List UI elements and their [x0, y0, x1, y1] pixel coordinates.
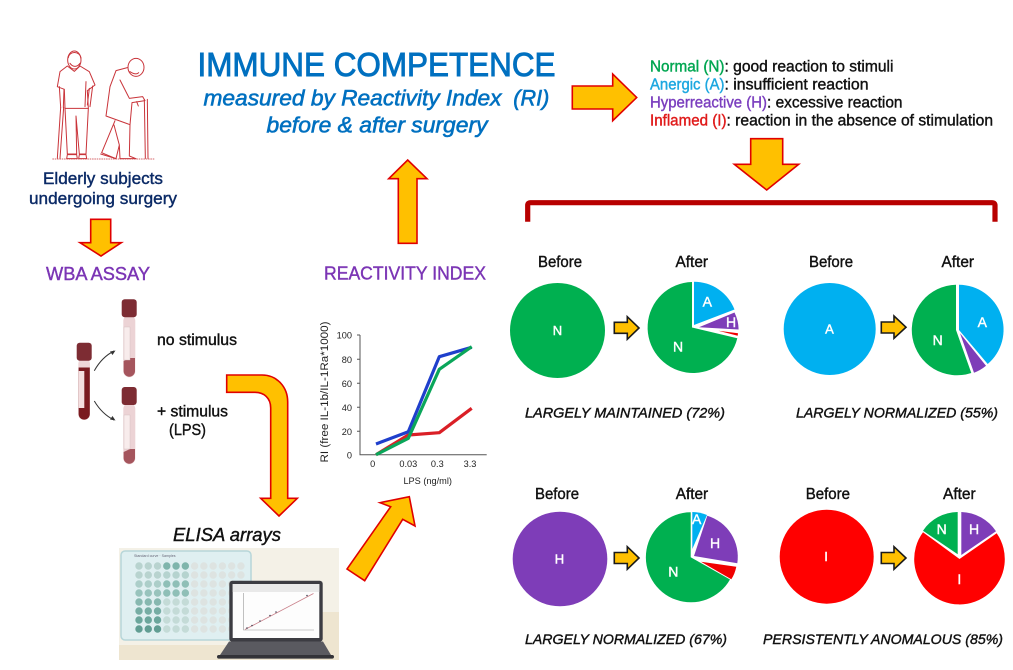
subtitle: before & after surgery [266, 112, 489, 137]
pie labels: N [668, 564, 678, 580]
arrow: before to after [881, 547, 906, 569]
legend: reactivity definitions [650, 58, 993, 130]
label: ELISA arrays: ELISA arrays [173, 524, 281, 545]
pie labels: I [957, 571, 961, 587]
pie labels [553, 294, 736, 354]
caption: LARGELY MAINTAINED (72%) [525, 405, 725, 421]
arrow: up to title [389, 160, 427, 243]
arrow: down to WBA assay [80, 219, 121, 256]
y axis labels: 0 [347, 450, 352, 460]
pie labels: I [824, 549, 828, 564]
legend: reactivity definitions: Normal (N) [650, 58, 724, 75]
legend: reactivity definitions: : excessive reaction [767, 95, 902, 112]
pie labels: N [937, 521, 947, 537]
y axis labels: 20 [342, 427, 352, 437]
line chart: reactivity index [319, 321, 487, 486]
label: elderly subjects: undergoing surgery [29, 189, 178, 208]
bracket [528, 203, 995, 222]
x axis labels: 0.3 [431, 459, 444, 469]
y axis title: RI (free IL-1b/IL-1Ra*1000) [319, 321, 331, 462]
pie labels: H [726, 314, 736, 330]
x axis title: LPS (ng/ml) [403, 476, 452, 486]
arrow: title to legend [572, 74, 637, 121]
pie labels: A [825, 322, 834, 336]
y axis labels: 40 [342, 403, 352, 413]
image: ELISA plate and laptop [119, 548, 339, 660]
x axis labels: 3.3 [464, 459, 476, 469]
pie: after [646, 512, 738, 602]
pie: after [912, 285, 1004, 375]
pie: before [784, 283, 876, 375]
image: ELISA plate and laptop: Standard curve · Samples [134, 554, 176, 558]
arrow: before to after [614, 317, 639, 339]
y axis labels: 60 [342, 379, 352, 389]
label: after: After [943, 486, 976, 503]
title: IMMUNE COMPETENCE [198, 47, 556, 84]
subtitle [204, 86, 549, 137]
pie labels [824, 521, 979, 587]
icon: elderly people with canes [53, 51, 155, 159]
label: no stimulus: no stimulus [157, 332, 237, 349]
x axis labels [370, 459, 476, 469]
label: after: After [942, 254, 974, 271]
caption: PERSISTENTLY ANOMALOUS (85%) [763, 631, 1003, 647]
pie labels: N [933, 332, 943, 348]
pie labels: H [969, 521, 979, 537]
arrow: before to after [614, 547, 639, 569]
y axis labels: 100 [337, 330, 352, 340]
pie: after [914, 512, 1005, 604]
caption: LARGELY NORMALIZED (67%) [525, 631, 727, 647]
pie: after [648, 282, 739, 373]
pie labels: H [555, 552, 564, 566]
x axis labels: 0.03 [399, 459, 417, 469]
legend: reactivity definitions: Hyperreactive (H) [650, 95, 767, 112]
label: elderly subjects: Elderly subjects [43, 169, 163, 188]
arrow: before to after [881, 316, 906, 338]
icon: blood tubes [77, 299, 137, 464]
y axis labels: 80 [342, 355, 352, 365]
legend: reactivity definitions: Inflamed (I) [650, 113, 726, 130]
label: after: After [676, 486, 708, 503]
arrow: legend to results [734, 139, 799, 190]
label: plus stimulus LPS: + stimulus [157, 404, 228, 421]
pie: before [513, 512, 607, 606]
panel: normal before and after [510, 254, 739, 421]
caption: LARGELY NORMALIZED (55%) [796, 405, 998, 421]
pie labels: A [703, 294, 713, 310]
panel: hyperreactive before and after [513, 486, 738, 647]
subtitle: (RI) [513, 86, 549, 111]
pie labels: A [978, 314, 988, 330]
label: plus stimulus LPS [157, 404, 228, 439]
label: before: Before [809, 254, 853, 271]
pie labels: H [710, 535, 720, 551]
pie labels: N [673, 338, 683, 354]
x axis labels: 0 [370, 459, 375, 469]
label: before: Before [806, 486, 850, 503]
pie labels: A [692, 511, 702, 527]
label: elderly subjects [29, 169, 178, 208]
legend: reactivity definitions: : good reaction to stimuli [724, 58, 894, 75]
label: before: Before [538, 254, 582, 271]
pie: before [780, 510, 874, 604]
legend: reactivity definitions: : reaction in the absence of stimulation [726, 113, 993, 130]
pie labels [555, 511, 720, 580]
arrow: ELISA to chart [347, 497, 415, 581]
heading: reactivity index: REACTIVITY INDEX [324, 262, 486, 283]
subtitle: measured by Reactivity Index [204, 86, 502, 111]
label: before: Before [535, 486, 579, 503]
label: after: After [676, 254, 708, 271]
panel: inflamed before and after [763, 486, 1005, 647]
title [198, 47, 556, 137]
legend: reactivity definitions: Anergic (A) [650, 76, 724, 93]
label: plus stimulus LPS: (LPS) [169, 422, 206, 439]
series lines [376, 347, 472, 455]
panel: anergic before and after [784, 254, 1004, 421]
heading: WBA assay: WBA ASSAY [46, 264, 150, 284]
pie: before [510, 283, 605, 378]
arrow: curved to ELISA arrays [227, 375, 297, 516]
pie labels [825, 314, 988, 348]
legend: reactivity definitions: : insufficient reaction [724, 76, 868, 93]
pie labels: N [553, 323, 562, 338]
y axis labels [337, 330, 352, 460]
